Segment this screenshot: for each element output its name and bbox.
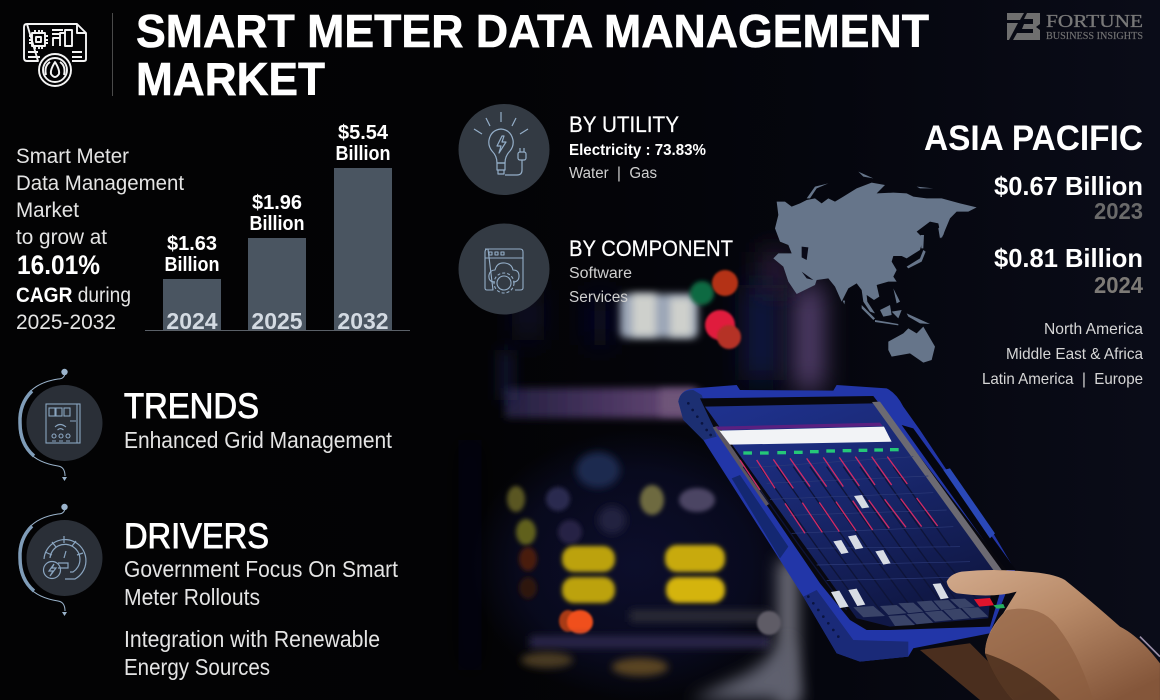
logo: Fortune Business Insights bbox=[1007, 11, 1143, 42]
icon: trends circle with meter bbox=[19, 369, 102, 481]
tablet case bbox=[678, 385, 1015, 662]
market growth text block: Market bbox=[16, 199, 79, 222]
bar 2024: $1.63 bbox=[167, 233, 217, 255]
trends heading: TRENDS bbox=[124, 387, 259, 426]
by component heading: BY COMPONENT bbox=[569, 236, 733, 261]
bar 2025: 2025 bbox=[251, 308, 303, 334]
by component values: Software bbox=[569, 265, 632, 282]
bottom button rows bbox=[853, 599, 988, 626]
bezel bbox=[700, 396, 1007, 630]
green meters bbox=[743, 448, 899, 455]
trends section bbox=[19, 369, 393, 481]
side clip bbox=[943, 468, 995, 538]
bar 2025: $1.96 bbox=[252, 192, 302, 214]
logo: Fortune Business Insights: BUSINESS INSIGHTS bbox=[1046, 31, 1143, 42]
drivers heading: DRIVERS bbox=[124, 517, 269, 556]
region heading: ASIA PACIFIC bbox=[924, 119, 1143, 158]
white fader caps bbox=[831, 495, 949, 608]
trends text: Enhanced Grid Management bbox=[124, 427, 393, 453]
value 2023: $0.67 Billion bbox=[994, 171, 1143, 201]
lower hand under tablet bbox=[920, 643, 1027, 700]
hand and pointing finger bbox=[947, 570, 1160, 700]
map: Asia Pacific bbox=[773, 172, 977, 363]
icon: light bulb with plug bbox=[458, 104, 550, 195]
drivers section bbox=[19, 504, 399, 680]
drivers text: Integration with Renewable bbox=[124, 626, 380, 652]
icon: software window with cloud gear bbox=[458, 224, 550, 314]
bar 2024 bbox=[163, 233, 221, 334]
drivers text: Meter Rollouts bbox=[124, 584, 260, 610]
regional market: Asia Pacific: 2024 bbox=[1094, 272, 1143, 298]
other regions bbox=[982, 321, 1143, 388]
bar chart bbox=[145, 122, 410, 334]
regional market: Asia Pacific bbox=[924, 119, 1143, 388]
left gray tablet edge bbox=[713, 426, 770, 506]
bar 2024: 2024 bbox=[166, 308, 218, 334]
bar 2032: Billion bbox=[336, 143, 390, 165]
logo mark bbox=[1007, 13, 1040, 40]
icon: smart meter document with gauge bbox=[24, 24, 86, 86]
market growth text block: 16.01% bbox=[17, 250, 100, 280]
logo: Fortune Business Insights: FORTUNE bbox=[1046, 11, 1143, 31]
title: MARKET bbox=[136, 53, 325, 105]
title: SMART METER DATA MANAGEMENT bbox=[136, 5, 929, 57]
by component values bbox=[569, 265, 632, 306]
regional market: Asia Pacific: 2023 bbox=[1094, 198, 1143, 224]
channel lines bbox=[743, 457, 980, 610]
bar 2025: Billion bbox=[250, 213, 304, 235]
icon: drivers circle with gauge bbox=[19, 504, 102, 616]
bumper dots bbox=[687, 402, 840, 638]
purple header strip bbox=[716, 423, 883, 430]
dark slot on right side of case bbox=[902, 425, 1016, 570]
tablet with mixing console screen bbox=[678, 385, 1160, 700]
value 2024: $0.81 Billion bbox=[994, 243, 1143, 273]
by utility heading: BY UTILITY bbox=[569, 112, 679, 137]
market growth text block bbox=[16, 145, 184, 334]
gray tablet edge bbox=[872, 402, 1002, 570]
red button bbox=[974, 598, 994, 607]
drivers text: Government Focus On Smart bbox=[124, 556, 399, 582]
rugged bumper bottom bbox=[803, 590, 908, 662]
market growth text block: 2025-2032 bbox=[16, 311, 116, 334]
by utility section bbox=[458, 104, 706, 195]
by utility values: Electricity : 73.83% bbox=[569, 142, 706, 159]
channel faders pink bbox=[740, 457, 938, 533]
by utility values: Water | Gas bbox=[569, 165, 657, 182]
other regions: Middle East & Africa bbox=[1006, 346, 1143, 363]
bar 2025 bbox=[248, 192, 306, 334]
bar 2024: Billion bbox=[164, 254, 220, 276]
market growth text block: CAGR during bbox=[16, 284, 131, 307]
market growth text block: to grow at bbox=[16, 226, 107, 249]
title bbox=[136, 5, 929, 105]
market growth text block: Smart Meter bbox=[16, 145, 129, 168]
bar 2032 bbox=[334, 122, 392, 334]
blurred server rack background photo bbox=[464, 252, 819, 700]
bar 2032: 2032 bbox=[337, 308, 389, 334]
by component values: Services bbox=[569, 289, 628, 306]
drivers text: Energy Sources bbox=[124, 654, 270, 680]
by utility values bbox=[569, 142, 706, 182]
other regions: North America bbox=[1044, 321, 1143, 338]
header divider bbox=[112, 13, 113, 96]
drivers text bbox=[124, 556, 399, 680]
screen bbox=[705, 403, 993, 627]
left side button bbox=[732, 475, 788, 558]
by component section bbox=[458, 224, 733, 314]
white strip bbox=[719, 427, 892, 445]
market growth text block: Data Management bbox=[16, 172, 184, 195]
other regions: Latin America | Europe bbox=[982, 371, 1143, 388]
bar 2032: $5.54 bbox=[338, 122, 389, 144]
rugged bumper top-left bbox=[678, 390, 717, 440]
